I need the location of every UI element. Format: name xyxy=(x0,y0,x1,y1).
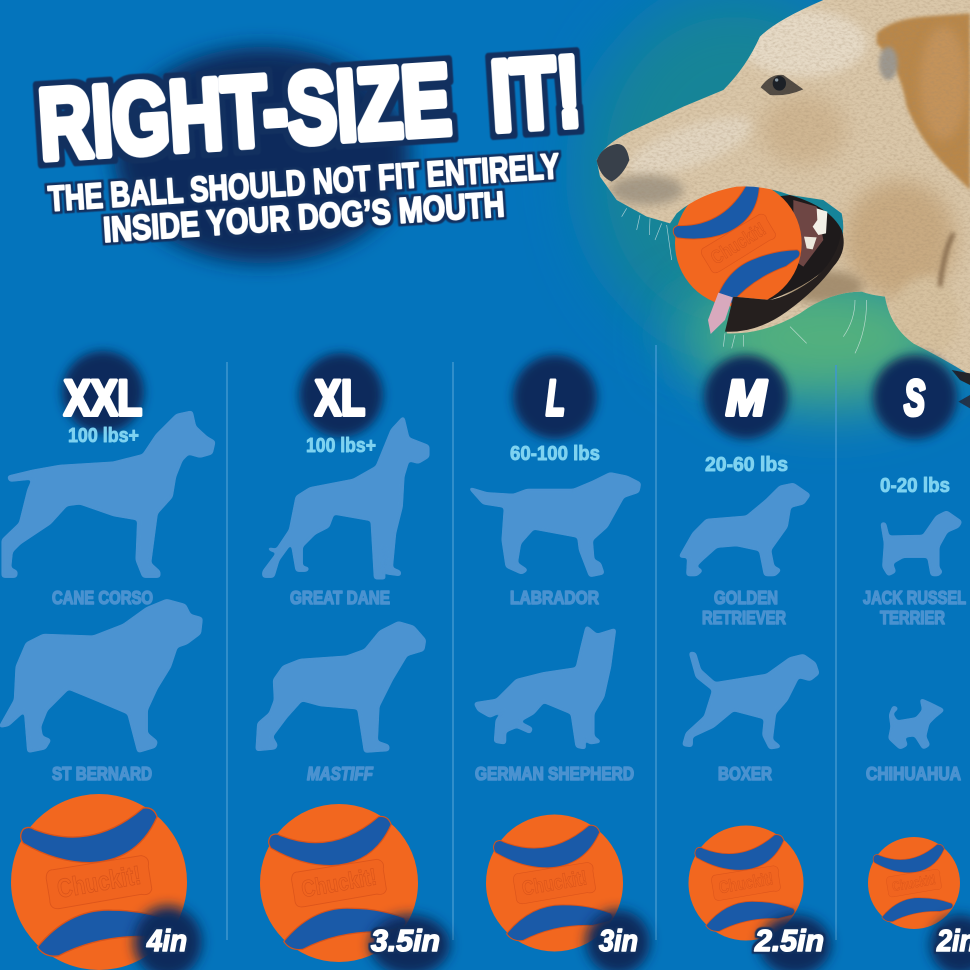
size label 3.5in xyxy=(370,915,450,970)
weight XXL: 100 lbs+ xyxy=(68,425,139,447)
column L xyxy=(470,355,640,784)
ball 3in: Chuckit! xyxy=(520,866,589,900)
ball 3.5in xyxy=(260,804,418,962)
weight L: 60-100 lbs xyxy=(510,443,600,465)
silhouette: german shepherd xyxy=(475,627,615,748)
eye xyxy=(761,75,803,95)
label: golden retriever xyxy=(702,588,786,628)
subtitle: INSIDE YOUR DOG’S MOUTH xyxy=(102,185,506,250)
silhouette: boxer xyxy=(683,653,818,748)
silhouette: jack russel terrier xyxy=(882,512,961,575)
size badge S: S xyxy=(904,370,925,426)
size badge XXL xyxy=(62,351,144,433)
weight XL: 100 lbs+ xyxy=(306,435,376,457)
background glow behind the dog xyxy=(585,0,955,404)
label: st bernard: ST BERNARD xyxy=(52,764,152,784)
size badge XL xyxy=(299,353,383,437)
ball 2.5in xyxy=(688,826,804,940)
label: golden retriever: GOLDEN xyxy=(714,588,778,608)
size badge L: L xyxy=(546,370,565,426)
gums and teeth xyxy=(793,200,827,267)
size label 3in: 3in xyxy=(599,923,638,958)
column XL xyxy=(257,353,428,784)
ball 2in xyxy=(868,837,960,929)
label: great dane: GREAT DANE xyxy=(290,588,390,608)
whiskers xyxy=(622,208,867,353)
tongue xyxy=(708,293,733,334)
size label 3.5in: 3.5in xyxy=(371,923,440,958)
size badge M xyxy=(704,355,788,439)
ball in mouth xyxy=(656,161,821,326)
silhouette: st bernard xyxy=(0,600,202,752)
silhouette: chihuahua xyxy=(889,699,943,748)
size label 2.5in: 2.5in xyxy=(754,923,824,958)
ball 4in: Chuckit! xyxy=(55,860,143,904)
size badge XL: XL xyxy=(315,370,365,426)
ball in mouth: Chuckit! xyxy=(707,219,770,269)
label: german shepherd: GERMAN SHEPHERD xyxy=(475,764,634,784)
dark lower lip xyxy=(725,230,844,332)
weight S: 0-20 lbs xyxy=(880,475,950,497)
label: mastiff: MASTIFF xyxy=(307,764,374,784)
size badge M: M xyxy=(726,370,767,426)
dog photo with ball in mouth xyxy=(590,0,970,408)
column S xyxy=(863,355,966,784)
size label 2in xyxy=(930,915,970,970)
size label 4in xyxy=(134,906,202,970)
silhouette: mastiff xyxy=(257,622,425,752)
size badge S xyxy=(873,355,957,439)
size label 3in xyxy=(586,910,650,970)
label: labrador: LABRADOR xyxy=(510,588,599,608)
ball 2.5in: Chuckit! xyxy=(717,868,775,897)
silhouette: labrador xyxy=(470,473,640,576)
silhouette: golden retriever xyxy=(680,484,809,575)
label: cane corso: CANE CORSO xyxy=(52,588,153,608)
subtitle: THE BALL SHOULD NOT FIT ENTIRELY xyxy=(47,147,560,219)
size badge XXL: XXL xyxy=(64,370,142,426)
ball 3in xyxy=(486,814,623,952)
subtitle xyxy=(47,147,560,250)
mouth interior xyxy=(690,195,843,331)
ball 4in xyxy=(11,794,187,970)
ball 2in: Chuckit! xyxy=(891,872,937,894)
size label 2.5in xyxy=(754,915,831,970)
size label 4in: 4in xyxy=(146,923,187,958)
silhouette: cane corso xyxy=(3,412,214,577)
label: jack russel terrier xyxy=(863,588,966,628)
label: boxer: BOXER xyxy=(718,764,772,784)
label: jack russel terrier: TERRIER xyxy=(880,608,945,628)
size badge L xyxy=(513,355,597,439)
fur shading xyxy=(590,0,970,400)
title dark blob xyxy=(114,47,410,263)
weight M: 20-60 lbs xyxy=(705,454,788,476)
collar xyxy=(952,370,970,408)
head xyxy=(597,0,970,375)
column dividers xyxy=(227,345,836,940)
silhouette: great dane xyxy=(263,417,428,578)
column XXL xyxy=(0,351,214,784)
ball 3.5in: Chuckit! xyxy=(300,864,379,903)
nose xyxy=(597,144,629,182)
label: golden retriever: RETRIEVER xyxy=(702,608,786,628)
column M xyxy=(680,355,818,784)
title: RIGHT-SIZE IT! xyxy=(35,35,584,180)
